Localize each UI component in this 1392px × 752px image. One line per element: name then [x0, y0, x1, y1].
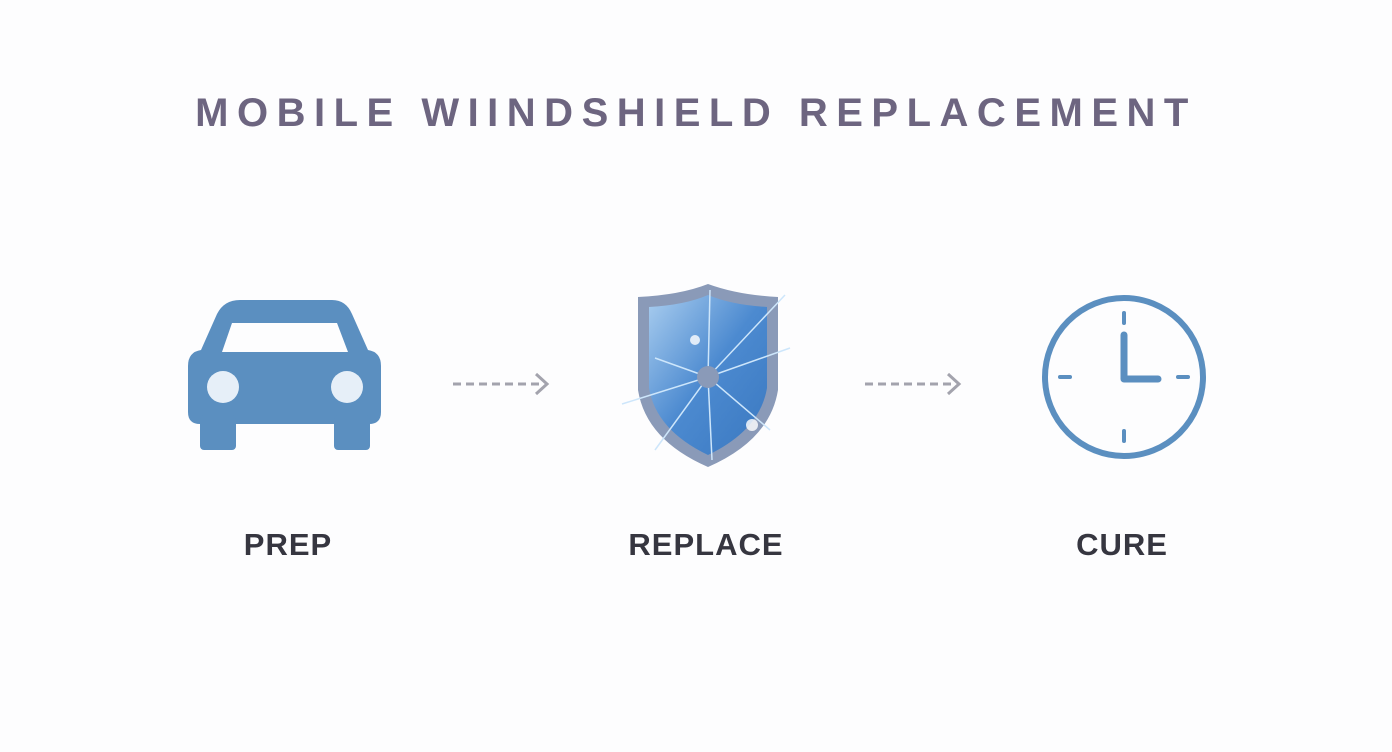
label: cure: CURE [1076, 527, 1168, 562]
arrow 1 [453, 373, 549, 395]
title: MOBILE WIINDSHIELD REPLACEMENT [195, 91, 1197, 135]
label: replace: REPLACE [628, 527, 784, 562]
icon: clock [1042, 295, 1206, 459]
label: prep: PREP [244, 527, 332, 562]
arrow 2 [865, 373, 961, 395]
icon: cracked shield [622, 284, 790, 467]
